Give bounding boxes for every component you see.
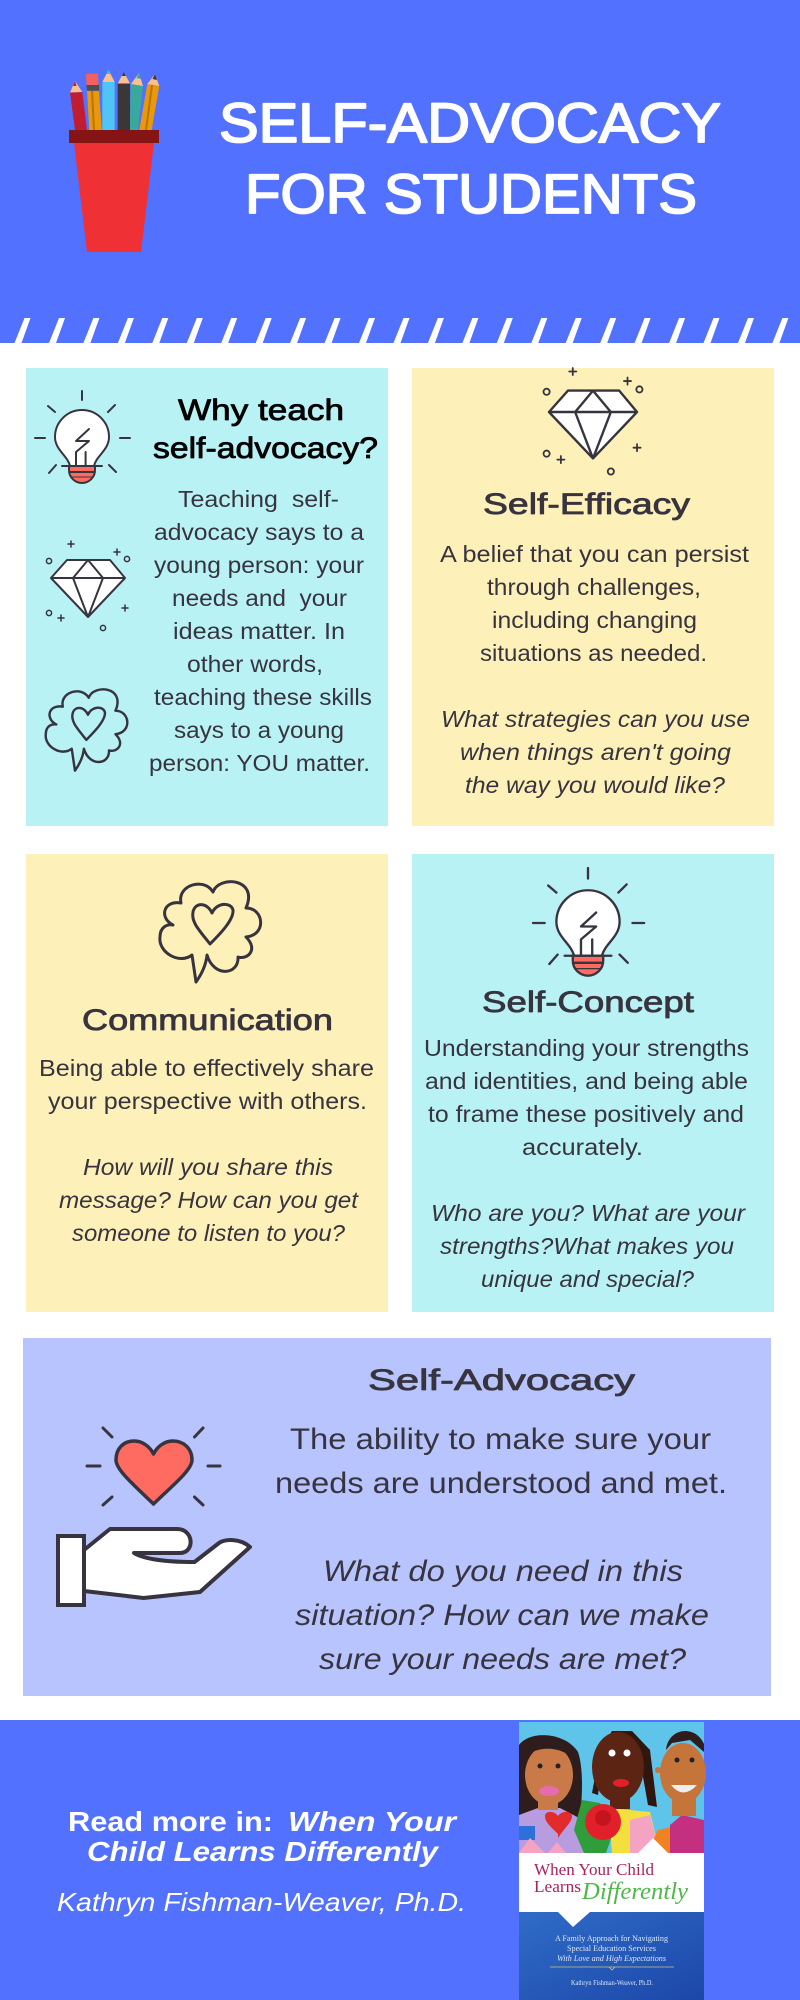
text: communication question (59, 1154, 360, 1246)
panel: self-concept (412, 854, 774, 1312)
text: self-efficacy definition: A belief that you can persist (440, 541, 750, 567)
text: self-efficacy definition: situations as needed. (480, 640, 707, 666)
icon: speech bubble with heart (160, 882, 261, 982)
cover title: Learns (534, 1877, 581, 1896)
text: self-efficacy question: the way you would like? (465, 772, 725, 798)
text: read more: Read more in: (68, 1806, 273, 1837)
text: self-concept question: strengths?What makes you (440, 1233, 734, 1259)
icon: pencil cup (69, 70, 159, 252)
footer banner (0, 1720, 800, 2000)
text: communication question: How will you share this (83, 1154, 334, 1180)
heading: why teach: Why teach (178, 394, 344, 427)
cover title (534, 1860, 688, 1905)
text: self-advocacy question (295, 1555, 709, 1676)
icon: light bulb (35, 391, 130, 483)
text: self-efficacy definition (440, 541, 750, 666)
text: read more (68, 1806, 458, 1867)
cover subtitle (550, 1934, 674, 1987)
text: why teach body: other words, (187, 651, 323, 677)
text: communication definition: your perspective with others. (48, 1088, 367, 1114)
text: self-efficacy definition: including changing (492, 607, 697, 633)
text: why teach body: needs and your (172, 585, 347, 611)
heading: why teach: self-advocacy? (153, 432, 378, 465)
text: author: Kathryn Fishman-Weaver, Ph.D. (57, 1887, 466, 1917)
text: self-concept question: unique and special? (481, 1266, 694, 1292)
heading: why teach (153, 394, 378, 465)
panel: why teach self-advocacy (26, 368, 388, 826)
text: self-concept definition (424, 1035, 749, 1160)
text: why teach body: advocacy says to a (154, 519, 364, 545)
text: why teach body: person: YOU matter. (149, 750, 370, 776)
text: why teach body: teaching these skills (154, 684, 372, 710)
text: self-advocacy definition: needs are understood and met. (275, 1467, 727, 1500)
text: self-concept definition: Understanding your strengths (424, 1035, 749, 1061)
text: self-advocacy definition (275, 1423, 727, 1500)
text: self-efficacy question: when things aren't going (460, 739, 731, 765)
text: communication definition: Being able to effectively share (39, 1055, 374, 1081)
text: self-efficacy question (441, 706, 750, 798)
text: self-concept definition: and identities, and being able (425, 1068, 748, 1094)
text: self-concept definition: accurately. (522, 1134, 643, 1160)
heading: self-advocacy: Self-Advocacy (368, 1364, 635, 1397)
text: why teach body: ideas matter. In (173, 618, 345, 644)
text: self-concept question: Who are you? What are your (431, 1200, 746, 1226)
cover subtitle: Kathryn Fishman-Weaver, Ph.D. (571, 1978, 653, 1987)
text: self-concept question (431, 1200, 746, 1292)
text: self-advocacy definition: The ability to make sure your (290, 1423, 711, 1456)
text: self-efficacy question: What strategies can you use (441, 706, 750, 732)
text: why teach body: says to a young (174, 717, 344, 743)
text: why teach body (149, 486, 372, 776)
panel: self-efficacy (412, 368, 774, 826)
text: self-concept definition: to frame these positively and (428, 1101, 744, 1127)
heading: self-efficacy: Self-Efficacy (483, 488, 690, 521)
text: communication definition (39, 1055, 374, 1114)
book cover (519, 1722, 706, 2000)
title: FOR STUDENTS (245, 162, 697, 225)
panel: self-advocacy (23, 1338, 771, 1696)
icon: diamond (543, 368, 643, 475)
icon: heart with rays (87, 1428, 220, 1505)
cover subtitle: A Family Approach for Navigating (555, 1934, 668, 1943)
text: why teach body: young person: your (154, 552, 364, 578)
heading: self-concept: Self-Concept (482, 986, 695, 1019)
text: read more: Child Learns Differently (87, 1836, 440, 1867)
cover title: Differently (581, 1879, 688, 1905)
icon: light bulb (533, 868, 644, 976)
icon: diamond (46, 541, 130, 631)
text: self-advocacy question: What do you need in this (323, 1555, 683, 1588)
icon: speech bubble with heart (46, 689, 127, 771)
cover illustration: three children (519, 1731, 706, 1853)
text: self-advocacy question: situation? How can we make (295, 1599, 709, 1632)
cover subtitle: With Love and High Expectations (557, 1954, 666, 1963)
header banner (0, 0, 800, 343)
text: read more: When Your (288, 1806, 458, 1837)
heading: communication: Communication (82, 1004, 333, 1037)
text: communication question: someone to listen to you? (72, 1220, 345, 1246)
title (219, 91, 721, 225)
cover subtitle: Special Education Services (567, 1944, 656, 1953)
text: self-advocacy question: sure your needs are met? (319, 1643, 686, 1676)
text: communication question: message? How can you get (59, 1187, 360, 1213)
text: self-efficacy definition: through challenges, (487, 574, 701, 600)
panel: communication (26, 854, 388, 1312)
title: SELF-ADVOCACY (219, 91, 721, 154)
cover title: When Your Child (534, 1860, 654, 1879)
icon: open hand (58, 1529, 250, 1605)
text: why teach body: Teaching self- (178, 486, 339, 512)
